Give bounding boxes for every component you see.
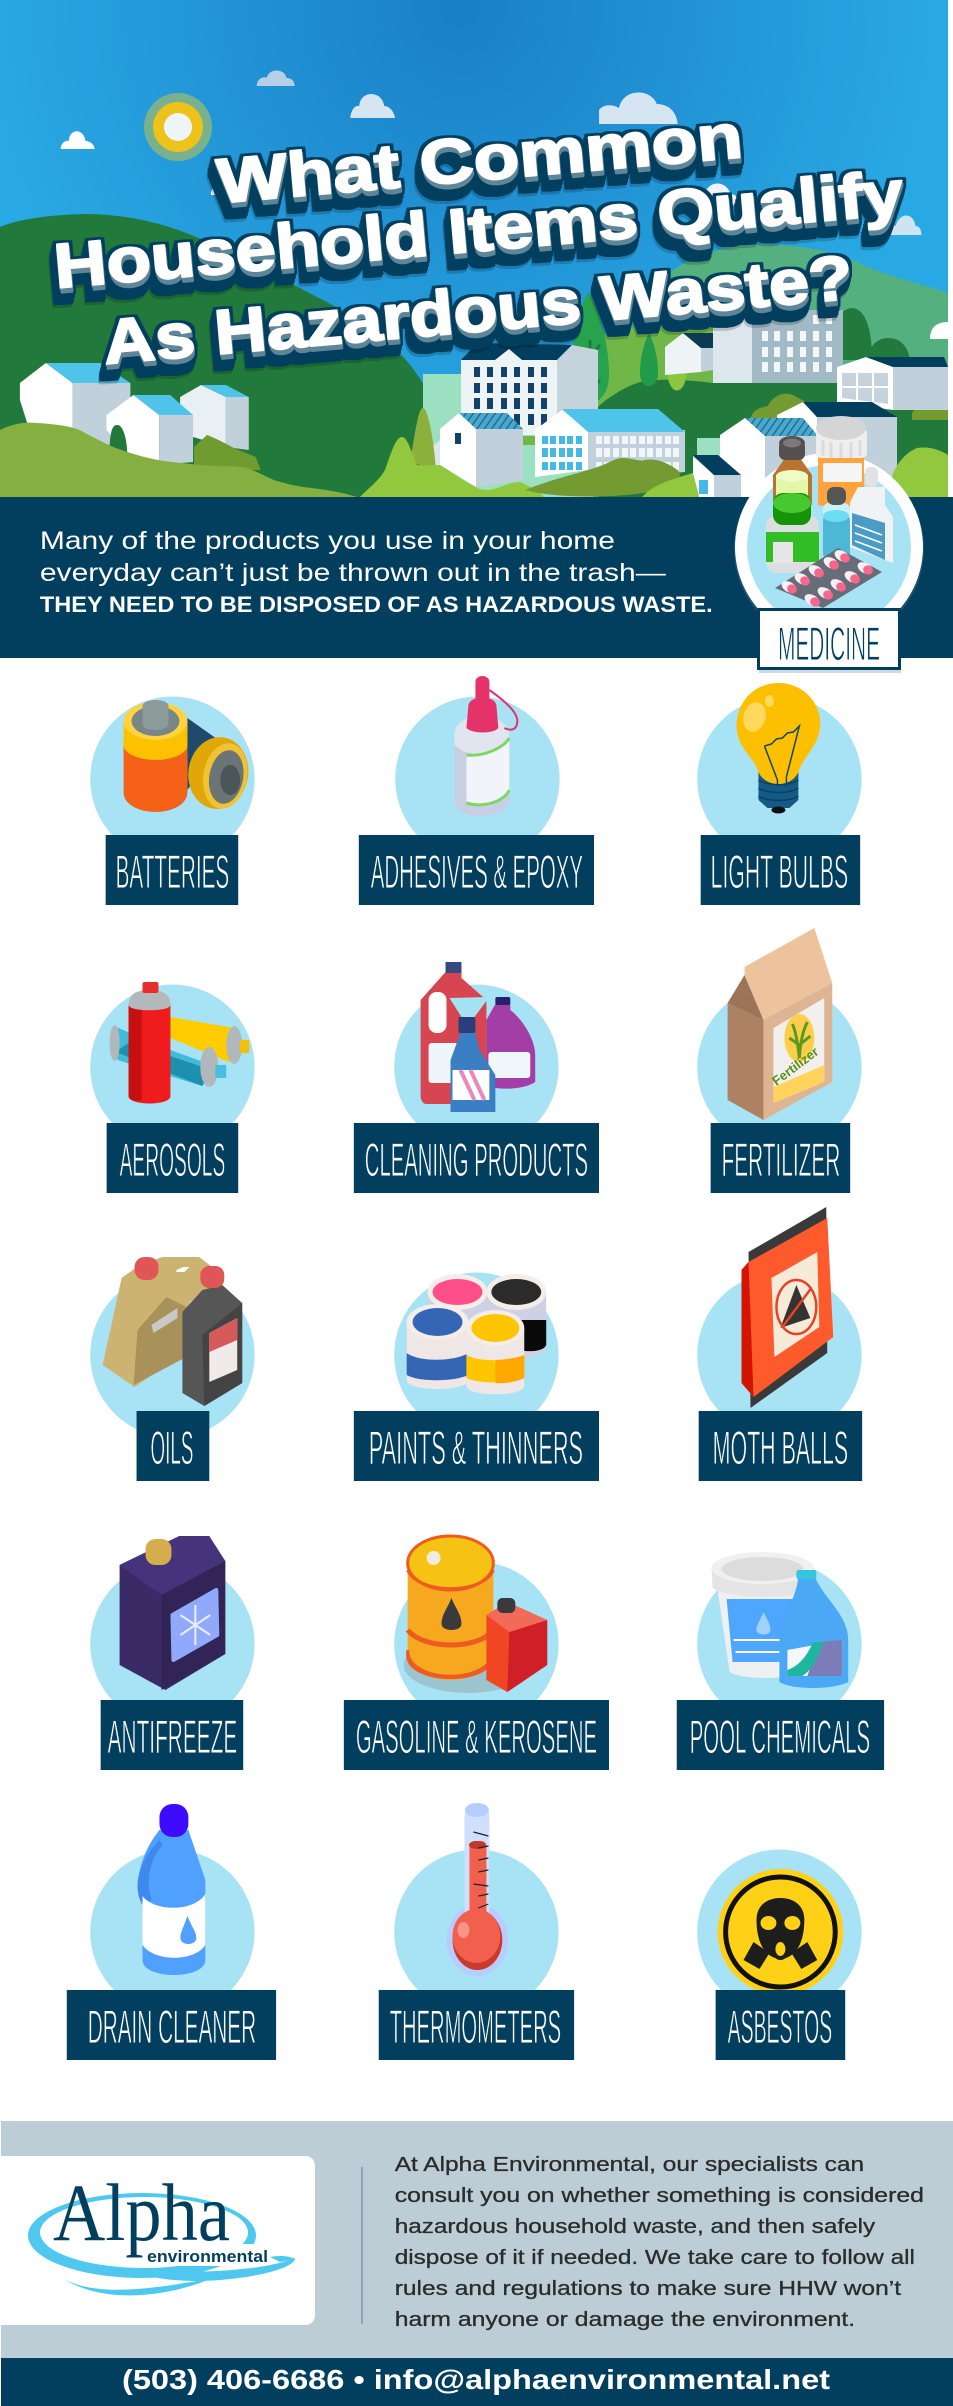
item: aerosols: [90, 982, 255, 1193]
title: What Common: [214, 101, 745, 217]
right house: [837, 357, 948, 410]
item: asbestos: [697, 1850, 862, 2060]
hero landscape illustration: [0, 0, 953, 500]
item: fertilizer: [697, 928, 862, 1193]
label: pool chemicals: [677, 1700, 884, 1770]
item grid: THERMOMETERS: [390, 2001, 561, 2053]
icon: drain cleaner bottle: [138, 1804, 205, 1975]
label: asbestos: [716, 1990, 845, 2060]
contact bar: [1, 2358, 953, 2406]
item grid: ADHESIVES & EPOXY: [371, 846, 583, 898]
footer paragraph: [395, 2154, 924, 2331]
label: batteries: [106, 835, 238, 905]
item: adhesives and epoxy: [359, 676, 594, 905]
item grid: PAINTS & THINNERS: [369, 1422, 583, 1474]
label: antifreeze: [101, 1700, 243, 1770]
intro text: [40, 527, 713, 617]
item: antifreeze: ANTIFREEZE: [108, 1711, 237, 1763]
foreground hills: [0, 408, 948, 500]
footer paragraph: dispose of it if needed. We take care to follow all: [395, 2247, 915, 2269]
logo swoosh: [28, 2193, 295, 2295]
sun: [144, 93, 212, 161]
label: thermometers: [379, 1990, 574, 2060]
label: drain cleaner: [67, 1990, 276, 2060]
contact bar: (503) 406-6686 • info@alphaenvironmental.net: [122, 2364, 830, 2395]
label: moth balls: [699, 1411, 862, 1481]
item: gasoline and kerosene: [344, 1536, 609, 1770]
left houses: [20, 363, 249, 465]
item grid: DRAIN CLEANER: [88, 2001, 256, 2053]
right cluster houses: [693, 402, 897, 500]
buildings: [20, 310, 948, 500]
icon: moth ball packet: [742, 1207, 833, 1408]
label: light bulbs: [701, 835, 860, 905]
label: paints and thinners: [354, 1411, 599, 1481]
label: oils: [137, 1411, 209, 1481]
intro band: [0, 497, 953, 658]
label: medicine: [758, 610, 901, 673]
icon: fertilizer bag: [728, 928, 832, 1120]
item: thermometers: [379, 1803, 574, 2060]
logo subtitle: environmental: [147, 2247, 268, 2266]
icon: cleaning bottles: [421, 962, 535, 1112]
label: adhesives and epoxy: [359, 835, 594, 905]
item: paints and thinners: [354, 1272, 599, 1481]
icon: aerosol cans: [110, 982, 249, 1104]
hills: [0, 214, 948, 500]
icon: barrel and jerry can: [404, 1536, 547, 1693]
footer paragraph: rules and regulations to make sure HHW won’t: [395, 2278, 902, 2300]
label: aerosols: [107, 1123, 238, 1193]
item: aerosols: AEROSOLS: [120, 1134, 225, 1186]
footer panel: [1, 2121, 953, 2358]
icon: thermometer: [447, 1803, 508, 1976]
icon: batteries: [124, 700, 253, 813]
upper right building: [665, 310, 843, 383]
tall center building: [461, 343, 598, 445]
footer paragraph: At Alpha Environmental, our specialists can: [395, 2154, 864, 2176]
item: antifreeze: [90, 1536, 255, 1770]
icon: fertilizer bag: Fertilizer: [769, 1044, 821, 1088]
center white house: [422, 413, 523, 487]
label: fertilizer: [711, 1123, 850, 1193]
logo wordmark: Alpha: [53, 2167, 230, 2258]
footer paragraph: hazardous household waste, and then safely: [395, 2216, 875, 2238]
item: drain cleaner: [67, 1804, 276, 2060]
trees: [571, 292, 686, 410]
label: gasoline and kerosene: [344, 1700, 609, 1770]
item: light bulbs: [697, 683, 862, 905]
icon: glue bottle: [454, 676, 517, 816]
item: pool chemicals: [677, 1552, 884, 1770]
icon: oil containers: [103, 1257, 242, 1406]
footer paragraph: consult you on whether something is considered: [395, 2185, 924, 2207]
item: medicine: [734, 416, 924, 673]
item: oils: [90, 1257, 255, 1481]
label: cleaning products: [354, 1123, 599, 1193]
intro text: everyday can’t just be thrown out in the trash—: [40, 559, 666, 587]
icon: light bulb: [737, 683, 820, 814]
label: oils: OILS: [151, 1422, 193, 1474]
title: As Hazardous Waste?: [100, 243, 855, 378]
intro text: THEY NEED TO BE DISPOSED OF AS HAZARDOUS WASTE.: [40, 592, 713, 617]
icon: pool chemical tub and bottle: [712, 1552, 848, 1688]
item: batteries: [90, 696, 255, 905]
item grid: GASOLINE & KEROSENE: [356, 1711, 597, 1763]
item grid: CLEANING PRODUCTS: [365, 1134, 588, 1186]
item: batteries: BATTERIES: [116, 846, 229, 898]
title: Household Items Qualify: [51, 158, 906, 302]
icon: medicine bottles and pills: [766, 416, 893, 608]
item grid: [67, 676, 884, 2060]
intro text: Many of the products you use in your home: [40, 527, 615, 555]
title: [51, 101, 906, 378]
item: moth balls: [697, 1207, 862, 1481]
hero right margin: [948, 0, 953, 497]
icon: paint cans: [407, 1274, 546, 1394]
icon: gas mask warning sign: [718, 1869, 843, 1995]
long cyan roof building: [535, 409, 685, 480]
logo card: [1, 2156, 315, 2325]
clouds: [61, 70, 921, 235]
footer paragraph: harm anyone or damage the environment.: [395, 2309, 855, 2331]
item: cleaning products: [354, 962, 599, 1193]
icon: antifreeze jug: [120, 1536, 225, 1690]
